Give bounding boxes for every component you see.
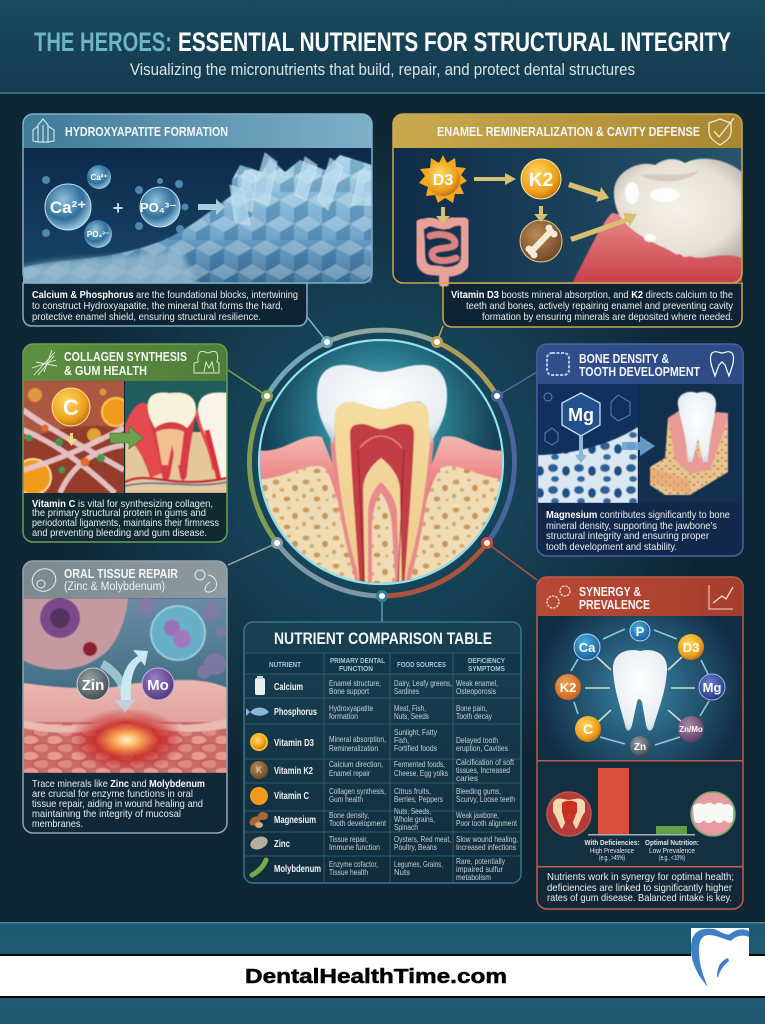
row: vitamin K2: tissues, Increased bbox=[456, 765, 510, 775]
header bar: & GUM HEALTH bbox=[64, 363, 147, 378]
bar labels bbox=[584, 838, 699, 862]
row: magnesium: Weak jawbone, bbox=[456, 810, 499, 820]
row: zinc: Poultry, Beans bbox=[394, 842, 437, 852]
row: vitamin K2: Calcification of soft bbox=[456, 757, 515, 767]
crown enamel bbox=[317, 365, 447, 444]
panel: synergy and prevalence bbox=[537, 577, 743, 909]
arrows bbox=[100, 650, 148, 712]
bubble: small calcium ion bbox=[87, 165, 111, 189]
icon: growth chart bbox=[709, 585, 733, 609]
collagen fibres bbox=[23, 410, 124, 493]
row: vitamin C: Collagen synthesis, bbox=[329, 786, 386, 796]
ball: K2: K2 bbox=[560, 680, 576, 695]
panel: bone density bbox=[537, 344, 743, 556]
icon: K2 coin bbox=[250, 761, 268, 779]
row: zinc bbox=[248, 834, 518, 852]
ball: zinc molybdenum: Zn/Mo bbox=[679, 725, 703, 734]
row: phosphorus: Nuts, Seeds bbox=[394, 711, 429, 721]
icon: bone lattice bbox=[547, 353, 569, 375]
header bar bbox=[393, 114, 742, 148]
icon: intestine bbox=[419, 221, 466, 283]
dentin bbox=[334, 402, 431, 590]
row: vitamin C: Berries, Peppers bbox=[394, 794, 443, 804]
panel: hydroxyapatite formation bbox=[18, 114, 372, 326]
text block: and preventing bleeding and gum disease. bbox=[32, 527, 207, 539]
illustration: vitamin C and collagen bbox=[15, 381, 230, 495]
icon: vitamin C bbox=[52, 388, 90, 446]
header bar: PREVALENCE bbox=[579, 597, 650, 612]
row: magnesium: Whole grains, bbox=[394, 814, 435, 824]
illustration: crystal formation bbox=[18, 148, 372, 290]
row: magnesium: Nuts, Seeds, bbox=[394, 806, 431, 816]
ball: zinc: Zin bbox=[82, 677, 104, 694]
header bar bbox=[538, 577, 742, 616]
ball: zinc bbox=[630, 736, 650, 756]
panel: nutrient comparison table bbox=[244, 622, 521, 883]
ring nodes bbox=[262, 338, 502, 600]
table grid bbox=[244, 653, 521, 883]
jaw bone bbox=[261, 465, 501, 580]
table head: DEFICIENCY bbox=[468, 656, 505, 665]
title: THE HEROES: bbox=[34, 27, 172, 57]
row: vitamin C: Citrus fruits, bbox=[394, 786, 431, 796]
text block: Nutrients work in synergy for optimal health; bbox=[547, 871, 734, 883]
inner root dentin bbox=[363, 458, 402, 590]
row: magnesium: Bone density, bbox=[329, 810, 369, 820]
row: vitamin C: Gum health bbox=[329, 794, 363, 804]
row: molybdenum: metabolism bbox=[456, 872, 491, 882]
bubble: phosphate ion bbox=[42, 176, 188, 237]
ball: D3 bbox=[678, 634, 704, 660]
text block: Vitamin C is vital for synthesizing collagen, bbox=[32, 498, 213, 510]
text block: structural integrity and ensuring proper bbox=[546, 530, 709, 542]
panel: collagen synthesis bbox=[15, 344, 230, 542]
row: molybdenum: Molybdenum bbox=[274, 864, 321, 875]
table head: PRIMARY DENTAL bbox=[330, 656, 385, 665]
text box: to construct Hydroxyapatite, the mineral that forms the hard, bbox=[32, 300, 283, 312]
text box: Vitamin D3 boosts mineral absorption, and K2 directs calcium to the bbox=[451, 289, 733, 301]
text box: protective enamel shield, ensuring structural resilience. bbox=[32, 311, 261, 323]
header bar bbox=[23, 114, 372, 148]
website name: DentalHealthTime.com bbox=[245, 966, 507, 988]
ball: vitamin C: C bbox=[583, 721, 593, 737]
tooth bbox=[613, 650, 667, 731]
header bar: SYNERGY & bbox=[579, 584, 641, 599]
bar labels: (e.g., >45%) bbox=[599, 853, 625, 862]
table head: FOOD SOURCES bbox=[397, 660, 446, 669]
icon: fibres bbox=[32, 350, 57, 375]
icon: molecules bbox=[195, 570, 217, 592]
row: vitamin D3: Vitamin D3 bbox=[274, 738, 314, 749]
row: vitamin K2: Enamel repair bbox=[329, 768, 370, 778]
illustration: remineralization pathway bbox=[393, 148, 742, 283]
text block: the primary structural protein in gums and bbox=[32, 507, 206, 519]
icon: magnesium hexagon: Mg bbox=[568, 405, 594, 425]
icon: vitamin K2 bbox=[521, 159, 561, 199]
row: calcium bbox=[255, 676, 498, 696]
bar labels: With Deficiencies: bbox=[584, 838, 640, 847]
icon: crystal bbox=[33, 119, 54, 142]
header bar bbox=[23, 561, 227, 598]
row: zinc: Zinc bbox=[274, 839, 290, 850]
row: zinc: Oysters, Red meat, bbox=[394, 834, 451, 844]
row: vitamin D3: Fish, bbox=[394, 735, 409, 745]
text block: mineral density, supporting the jawbone's bbox=[546, 520, 717, 532]
bar chart bbox=[538, 760, 742, 866]
bar labels: (e.g., <10%) bbox=[659, 853, 685, 862]
text block: periodontal ligaments, maintains their firmness bbox=[32, 517, 219, 529]
text block bbox=[547, 871, 734, 904]
plus sign: + bbox=[113, 198, 123, 218]
row: calcium: Sardines bbox=[394, 686, 419, 696]
row: vitamin D3: Sunlight, Fatty bbox=[394, 727, 438, 737]
header bar bbox=[23, 344, 227, 381]
bar labels: Optimal Nutrition: bbox=[645, 838, 699, 847]
icon: bone coin bbox=[520, 220, 562, 262]
arrow bbox=[198, 199, 225, 215]
bubble: small calcium ion: Ca²⁺ bbox=[90, 173, 108, 182]
row: molybdenum: Rare, potentially bbox=[456, 856, 506, 866]
ball: molybdenum: Mo bbox=[147, 677, 169, 694]
arrows bbox=[436, 173, 637, 242]
text box bbox=[23, 283, 307, 326]
icon: vitamin D3 sun: D3 bbox=[433, 172, 453, 189]
ball: magnesium bbox=[699, 674, 725, 700]
row: vitamin K2: caries bbox=[456, 773, 478, 783]
row: zinc: Increased infections bbox=[456, 842, 516, 852]
table head: FUNCTION bbox=[339, 664, 373, 673]
bubble: calcium ion bbox=[45, 184, 91, 230]
inner bone bbox=[372, 493, 396, 590]
panel: oral tissue repair bbox=[23, 561, 227, 833]
row: vitamin C bbox=[250, 786, 515, 805]
header band bbox=[0, 0, 765, 94]
text block: membranes. bbox=[32, 818, 83, 830]
row: vitamin D3: eruption, Cavities bbox=[456, 743, 508, 753]
icon: gears bbox=[547, 586, 570, 608]
footer bbox=[0, 922, 765, 1024]
text block: Magnesium contributes significantly to bone bbox=[546, 509, 730, 521]
row: zinc: Immune function bbox=[329, 842, 380, 852]
text block: deficiencies are linked to significantly higher bbox=[547, 882, 732, 894]
ball: zinc bbox=[77, 668, 109, 700]
text box: Calcium & Phosphorus are the foundational blocks, intertwining bbox=[32, 289, 298, 301]
header bar: (Zinc & Molybdenum) bbox=[64, 581, 165, 593]
header bar: ENAMEL REMINERALIZATION & CAVITY DEFENSE bbox=[437, 124, 700, 139]
icon: shield check bbox=[709, 118, 734, 145]
panel: enamel remineralization bbox=[393, 114, 742, 327]
subtitle: Visualizing the micronutrients that build, repair, and protect dental structures bbox=[130, 61, 635, 79]
arrows around cycle bbox=[571, 629, 709, 745]
bubble: small phosphate: PO₄³⁻ bbox=[87, 230, 109, 239]
healing cell bbox=[151, 606, 205, 660]
text block bbox=[32, 498, 219, 539]
outer ring bbox=[249, 330, 515, 596]
row: molybdenum: Enzyme cofactor, bbox=[329, 859, 378, 869]
bubble: small phosphate bbox=[84, 220, 112, 248]
icon: magnesium hexagon bbox=[562, 393, 600, 463]
arrow bbox=[110, 426, 143, 449]
row: vitamin C: Bleeding gums, bbox=[456, 786, 501, 796]
ball: calcium bbox=[574, 634, 600, 660]
row: zinc: Tissue repair, bbox=[329, 834, 368, 844]
text block bbox=[32, 778, 205, 830]
icon: oyster bbox=[248, 834, 270, 852]
text box bbox=[443, 283, 742, 327]
ball: vitamin C bbox=[575, 716, 601, 742]
header bar: COLLAGEN SYNTHESIS bbox=[64, 349, 187, 364]
table head: NUTRIENT bbox=[269, 660, 301, 669]
icon: logo tooth bbox=[691, 928, 749, 987]
row: molybdenum: Tissue health bbox=[329, 867, 368, 877]
ball: phosphorus: P bbox=[636, 624, 645, 639]
gums bbox=[260, 436, 338, 502]
icon: orange bbox=[250, 787, 268, 805]
row: calcium: Dairy, Leafy greens, bbox=[394, 678, 452, 688]
row: vitamin K2: Vitamin K2 bbox=[274, 766, 313, 777]
row: vitamin D3: Remineralization bbox=[329, 743, 378, 753]
row: magnesium: Spinach bbox=[394, 822, 418, 832]
illustration: magnesium and bone bbox=[538, 384, 742, 503]
text block: rates of gum disease. Balanced intake is key. bbox=[547, 892, 732, 904]
ball: zinc: Zn bbox=[634, 742, 646, 753]
central tooth diagram bbox=[249, 330, 515, 600]
table head: SYMPTOMS bbox=[468, 664, 505, 673]
row: phosphorus: Meat, Fish, bbox=[394, 703, 426, 713]
icon: legumes bbox=[252, 860, 266, 875]
icon: vitamin K2: K2 bbox=[529, 170, 553, 191]
text block: Trace minerals like Zinc and Molybdenum bbox=[32, 778, 205, 790]
arrow bbox=[622, 436, 655, 456]
row: molybdenum: Nuts bbox=[394, 867, 410, 877]
row: calcium: Calcium bbox=[274, 682, 303, 693]
icon: healthy teeth bbox=[691, 792, 735, 836]
icon: tooth bbox=[710, 352, 734, 376]
row: vitamin K2 bbox=[250, 757, 515, 783]
row: phosphorus: Bone pain, bbox=[456, 703, 487, 713]
icon: sun bbox=[250, 733, 268, 751]
row: calcium: Weak enamel, bbox=[456, 678, 498, 688]
header bar: ORAL TISSUE REPAIR bbox=[64, 566, 178, 581]
icon: cell bbox=[28, 564, 60, 596]
row: magnesium: Magnesium bbox=[274, 815, 316, 826]
text box: teeth and bones, actively repairing enamel and preventing cavity bbox=[466, 300, 734, 312]
bar labels: High Prevalence bbox=[590, 846, 634, 855]
ball: molybdenum bbox=[142, 668, 174, 700]
row: calcium: Bone support bbox=[329, 686, 369, 696]
row: vitamin C: Vitamin C bbox=[274, 791, 309, 802]
pulp bbox=[350, 424, 414, 590]
table head bbox=[269, 656, 505, 673]
icon: bottle bbox=[255, 676, 265, 695]
header bar: BONE DENSITY & bbox=[579, 351, 669, 366]
ball: phosphorus bbox=[630, 621, 650, 641]
header bar: HYDROXYAPATITE FORMATION bbox=[65, 124, 228, 139]
illustration: tissue repair bbox=[23, 597, 227, 773]
tissue layers bbox=[24, 679, 226, 723]
text box: formation by ensuring minerals are deposited where needed. bbox=[482, 311, 733, 323]
text block: maintaining the integrity of mucosal bbox=[32, 808, 181, 820]
row: vitamin D3: Delayed tooth bbox=[456, 735, 498, 745]
icon: nuts bbox=[248, 812, 268, 828]
text block: tooth development and stability. bbox=[546, 541, 677, 553]
row: vitamin K2: Cheese, Egg yolks bbox=[394, 768, 448, 778]
icon: vitamin D3 sun bbox=[419, 155, 467, 203]
illustration: nutrient synergy cycle bbox=[538, 616, 742, 761]
row: vitamin D3 bbox=[250, 727, 508, 753]
row: vitamin D3: Fortified foods bbox=[394, 743, 437, 753]
ball: D3: D3 bbox=[683, 640, 699, 655]
molar bbox=[614, 159, 742, 258]
tooth root sheath bbox=[330, 440, 434, 590]
icon: tooth in gum bbox=[194, 351, 219, 373]
gum bbox=[572, 213, 742, 283]
inner root sheath bbox=[368, 482, 400, 590]
table title: NUTRIENT COMPARISON TABLE bbox=[274, 629, 492, 648]
icon: vitamin C: C bbox=[63, 395, 79, 420]
row: phosphorus: formation bbox=[329, 711, 358, 721]
icon: decayed tooth bbox=[547, 792, 591, 836]
bar labels: Low Prevalence bbox=[649, 846, 695, 855]
orange slices bbox=[24, 396, 124, 493]
row: vitamin C: Scurvy, Loose teeth bbox=[456, 794, 515, 804]
canals bbox=[358, 450, 404, 585]
row: zinc: Slow wound healing, bbox=[456, 834, 518, 844]
header bar bbox=[538, 344, 742, 384]
row: phosphorus: Hydroxyapatite bbox=[329, 703, 373, 713]
icon: fish bbox=[246, 708, 269, 716]
ball: K2 bbox=[555, 674, 581, 700]
row: magnesium: Poor tooth alignment bbox=[456, 818, 517, 828]
text block: tissue repair, aiding in wound healing and bbox=[32, 798, 203, 810]
connector lines bbox=[228, 317, 537, 622]
row: phosphorus: Tooth decay bbox=[456, 711, 493, 721]
row: vitamin K2: Fermented foods, bbox=[394, 759, 445, 769]
ball: calcium: Ca bbox=[579, 640, 596, 655]
ball: magnesium: Mg bbox=[703, 680, 721, 695]
row: vitamin K2: Calcium direction, bbox=[329, 759, 383, 769]
bubble: phosphate ion: PO₄³⁻ bbox=[140, 200, 176, 215]
row: molybdenum bbox=[252, 856, 506, 882]
row: molybdenum: impaired sulfur bbox=[456, 864, 503, 874]
row: magnesium: Tooth development bbox=[329, 818, 387, 828]
row: magnesium bbox=[248, 806, 517, 832]
row: calcium: Osteoporosis bbox=[456, 686, 496, 696]
small molar bbox=[678, 392, 716, 462]
icon: K2 coin: K bbox=[256, 765, 262, 775]
header bar: TOOTH DEVELOPMENT bbox=[579, 364, 700, 379]
row: vitamin D3: Mineral absorption, bbox=[329, 734, 386, 744]
ball: zinc molybdenum bbox=[678, 716, 704, 742]
row: phosphorus bbox=[246, 703, 493, 721]
text block: are crucial for enzyme functions in oral bbox=[32, 788, 193, 800]
row: calcium: Enamel structure, bbox=[329, 678, 381, 688]
row: phosphorus: Phosphorus bbox=[274, 707, 317, 718]
bubble: calcium ion: Ca²⁺ bbox=[50, 198, 86, 217]
text block bbox=[546, 509, 730, 553]
row: molybdenum: Legumes, Grains, bbox=[394, 859, 443, 869]
bone block bbox=[650, 413, 728, 495]
